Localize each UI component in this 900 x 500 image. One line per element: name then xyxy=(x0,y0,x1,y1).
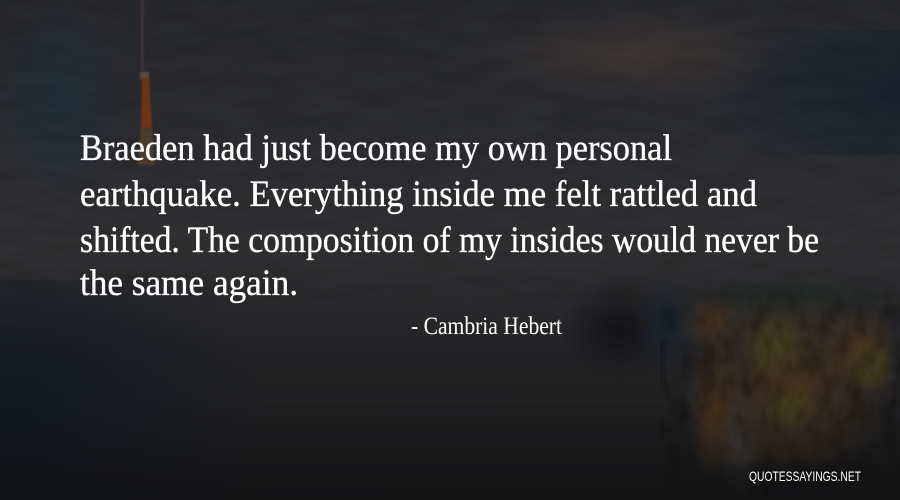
background: tower xyxy=(138,0,155,165)
quote text: Braeden had just become my own personal xyxy=(80,128,672,169)
watermark: QUOTESSAYINGS.NET xyxy=(749,468,861,484)
author attribution: - Cambria Hebert xyxy=(411,313,562,340)
quote text: shifted. The composition of my insides would never be xyxy=(80,220,819,261)
quote text: earthquake. Everything inside me felt rattled and xyxy=(80,174,757,215)
quote text: the same again. xyxy=(80,263,298,304)
background: autumn cliff xyxy=(680,278,900,500)
background: cloud and foliage texture xyxy=(660,304,900,443)
quote text xyxy=(80,128,819,304)
